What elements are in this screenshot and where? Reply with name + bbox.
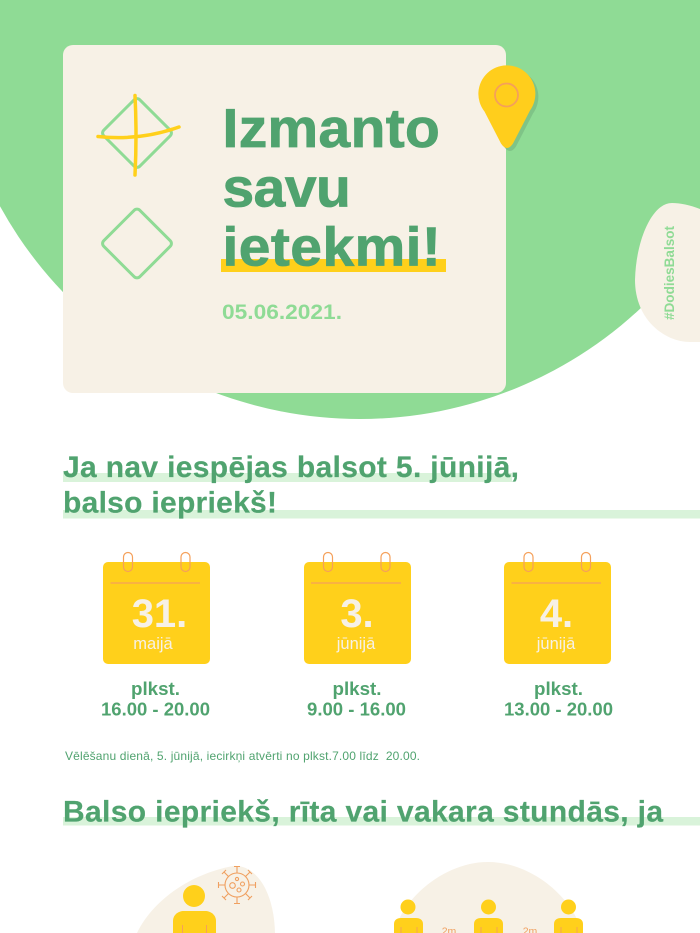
opening hours: 3 June: 9.00 - 16.00: [307, 700, 406, 720]
heading: vote early: balso iepriekš!: [63, 486, 277, 520]
calendar: 3 June: [304, 552, 411, 664]
opening hours: 3 June: [307, 679, 406, 720]
calendar: 31 May: 31.: [132, 592, 187, 636]
calendar: 3 June: jūnijā: [336, 635, 376, 653]
title: savu: [222, 156, 351, 218]
opening hours: 31 May: plkst.: [131, 679, 180, 699]
green background circle: [0, 0, 700, 419]
icon: empty ballot diamond: [101, 207, 173, 280]
calendar: 4 June: 4.: [540, 592, 573, 636]
election day note: Vēlēšanu dienā, 5. jūnijā, iecirkņi atvērti no plkst.7.00 līdz 20.00.: [65, 749, 420, 763]
opening hours: 31 May: 16.00 - 20.00: [101, 700, 210, 720]
title: [222, 97, 441, 277]
hashtag blob: [635, 203, 700, 342]
calendar: 4 June: [504, 552, 611, 664]
calendar: 4 June: jūnijā: [536, 635, 576, 653]
heading: vote early: Ja nav iespējas balsot 5. jūnijā,: [63, 451, 519, 484]
icon: crossed ballot diamond: [98, 96, 179, 175]
opening hours: 4 June: [504, 679, 613, 720]
calendar: 31 May: [103, 552, 210, 664]
icon: person right: [554, 900, 583, 933]
opening hours: 3 June: plkst.: [332, 679, 382, 699]
icon: person left: [394, 900, 423, 933]
title underline: [221, 259, 446, 272]
icon: virus: [218, 866, 256, 904]
opening hours: 4 June: plkst.: [534, 679, 583, 699]
heading: vote early: [63, 451, 700, 520]
title: ietekmi!: [222, 215, 441, 277]
opening hours: 31 May: [101, 679, 210, 720]
heading: vote in morning or evening: Balso iepriekš, rīta vai vakara stundās, ja: [63, 796, 663, 828]
icon: person: [173, 885, 216, 933]
title: Izmanto: [222, 97, 440, 159]
panel: title card: [63, 45, 506, 393]
calendar: 31 May: maijā: [133, 635, 174, 653]
icon: person centre: [474, 900, 503, 933]
hashtag text: #DodiesBalsot: [661, 226, 677, 320]
calendar: 3 June: 3.: [340, 592, 374, 636]
opening hours: 4 June: 13.00 - 20.00: [504, 700, 613, 720]
illustration: person and virus: [137, 866, 275, 933]
illustration: people keeping distance: [394, 862, 583, 933]
date: 05.06.2021.: [222, 301, 342, 324]
icon: map pin: [478, 65, 538, 151]
